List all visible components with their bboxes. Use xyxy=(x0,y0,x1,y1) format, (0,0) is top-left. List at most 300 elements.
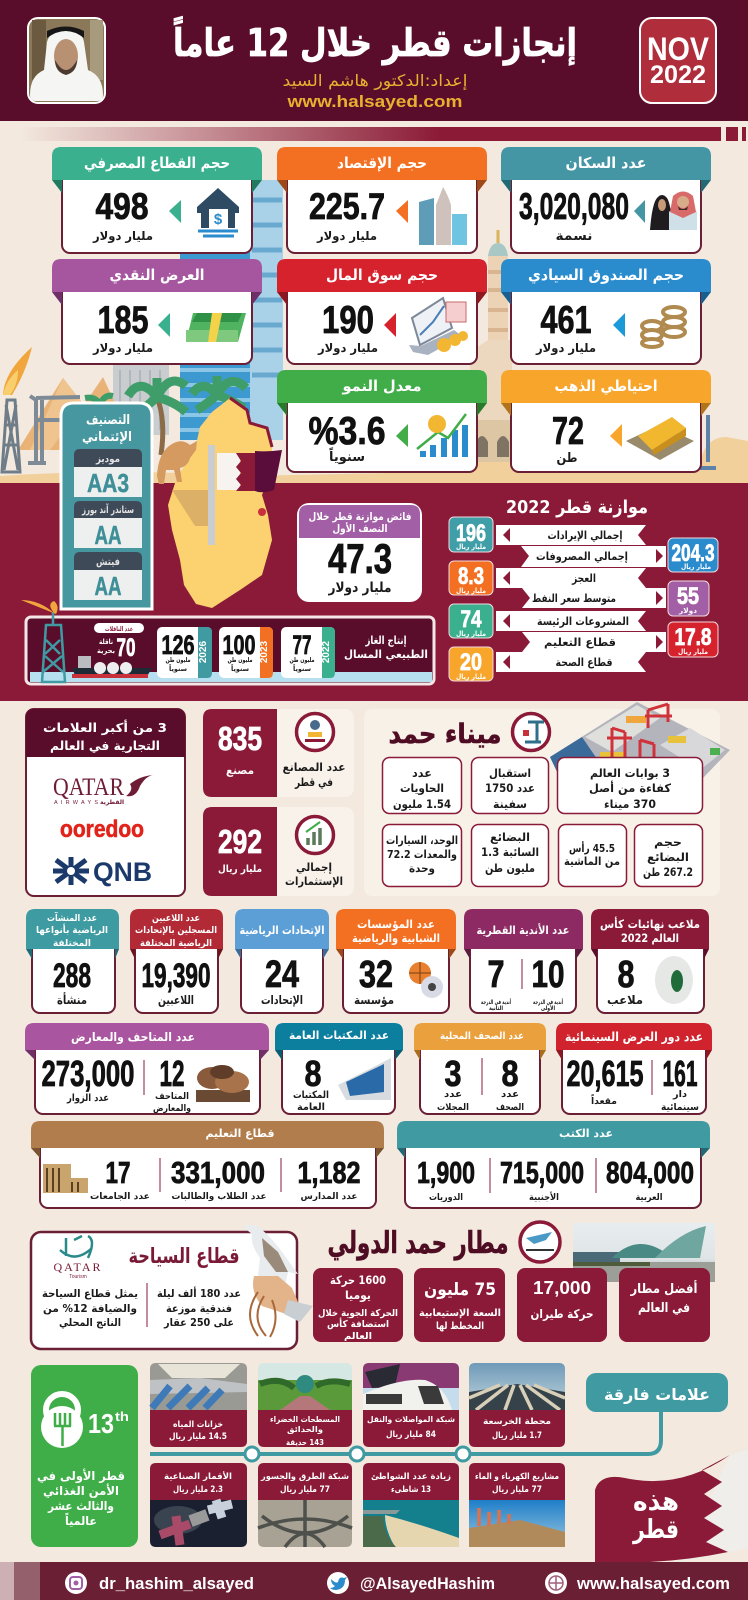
rating: Fitch: AA xyxy=(94,571,122,601)
flag pole xyxy=(208,445,215,545)
stat card: sovereign fund: حجم الصندوق السيادي xyxy=(528,266,684,285)
panel: tourism: يمثل قطاع السياحة xyxy=(42,1288,138,1300)
panel: food security: قطر الأولى في xyxy=(37,1468,125,1484)
rating: Fitch: فيتش xyxy=(96,557,120,568)
flag with text: this is Qatar: هذه xyxy=(633,1487,679,1517)
stat card: sports facilities: منشأة xyxy=(57,992,87,1007)
stat card: stadiums: 8 xyxy=(618,954,634,996)
stat card: capital market: مليار دولار xyxy=(317,341,378,356)
airport fact: World Cup traffic: الحركة الجوية خلال xyxy=(318,1308,398,1319)
stat card: local newspapers: الصحف xyxy=(496,1102,524,1113)
icon: globe xyxy=(545,1572,567,1594)
panel: investments: الإستثمارات xyxy=(285,875,343,888)
LNG 2023: 100 xyxy=(222,630,256,660)
icon: instagram xyxy=(65,1572,87,1594)
port fact: vehicles: وحدة xyxy=(409,862,435,875)
port fact: gateways: كفاءة من أصل xyxy=(589,780,671,795)
panel: top brands: 3 من أكبر العلامات xyxy=(43,719,167,735)
stat card: museums: المتاحف xyxy=(155,1092,189,1102)
port fact: vehicles xyxy=(382,824,462,886)
stat card: education sector: عدد الطلاب والطالبات xyxy=(172,1192,266,1202)
stat card: clubs: عدد الأندية القطرية xyxy=(476,923,570,937)
port fact: bulk cargo: مليون طن xyxy=(485,861,535,876)
stat card: growth rate: سنوياً xyxy=(329,447,365,465)
stat card: clubs: أندية في الدرجة xyxy=(533,998,563,1006)
stat card: stadiums: ملاعب نهائيات كأس xyxy=(600,916,700,931)
stat card: education sector: عدد المدارس xyxy=(300,1192,358,1202)
port fact: containers: الحاويات xyxy=(400,781,444,796)
panel: tourism: الناتج المحلي xyxy=(59,1317,121,1329)
milestone: roads: 77 مليار ريال xyxy=(280,1485,330,1495)
logo: Qatar Airways: QATAR xyxy=(53,774,124,801)
stat card: economy xyxy=(277,147,487,253)
panel: top brands: التجارية في العالم xyxy=(50,738,160,753)
heading: airport: مطار حمد الدولي xyxy=(328,1226,508,1261)
stat card: capital market: حجم سوق المال xyxy=(326,266,438,284)
airport fact: best airport xyxy=(619,1268,710,1342)
stat card: economy: 225.7 xyxy=(309,186,385,227)
tanker count: بحرية xyxy=(97,647,115,655)
stat card: youth institutions xyxy=(336,909,456,1013)
budget row: oil price: متوسط سعر النفط xyxy=(532,592,616,605)
heading: milestones: علامات فارقة xyxy=(604,1385,710,1404)
stat card: local newspapers: عدد xyxy=(501,1089,519,1100)
budget row: health: مليار ريال xyxy=(456,673,486,681)
budget row: major projects: 74 xyxy=(460,606,482,633)
stat card: museums: والمعارض xyxy=(153,1104,191,1114)
milestone: green spaces: 143 حديقة xyxy=(286,1438,324,1447)
budget row: major projects: مليار ريال xyxy=(456,630,486,638)
port fact: gateways xyxy=(558,758,702,814)
port fact: livestock xyxy=(558,824,626,886)
icon: gold bars xyxy=(626,417,694,460)
stat card: local newspapers: 3 xyxy=(444,1053,462,1094)
milestone connector line xyxy=(150,1412,661,1461)
port fact: containers xyxy=(382,758,462,814)
LNG 2023: سنوياً xyxy=(230,664,249,673)
panel: investments: إجمالي xyxy=(296,861,332,874)
card: budget surplus: 47.3 xyxy=(328,535,392,582)
panel: LNG production: الطبيعي المسال xyxy=(344,648,428,661)
stat card: sovereign fund: 461 xyxy=(540,299,592,342)
stat card: growth rate xyxy=(277,370,487,472)
stat card: books: 715,000 xyxy=(500,1155,584,1190)
airport fact: best airport: أفضل مطار xyxy=(630,1280,698,1297)
card: budget surplus xyxy=(297,503,422,602)
stat card: clubs: الأولى xyxy=(541,1004,555,1012)
icon: coins xyxy=(642,307,685,347)
port fact: gateways: 3 بوابات العالم xyxy=(590,766,670,781)
stat card: clubs: 7 xyxy=(488,954,504,996)
budget row: deficit: 8.3 xyxy=(458,563,484,590)
airport fact: World Cup traffic: 1600 حركة xyxy=(330,1273,386,1287)
logo: Qatar Tourism xyxy=(53,1236,103,1280)
stat card: money supply xyxy=(52,259,262,364)
stat card: population xyxy=(501,147,711,253)
LNG 2026: مليون طن xyxy=(166,656,190,664)
heading: ميناء حمد xyxy=(388,719,502,750)
milestone: roads: شبكة الطرق والجسور xyxy=(260,1472,349,1482)
port fact: cargo volume: 267.2 طن xyxy=(643,865,693,879)
stat card: clubs: الثانية xyxy=(489,1005,503,1012)
icon: bank: $ xyxy=(214,211,223,228)
footer band xyxy=(0,1562,748,1600)
stat card: growth rate: معدل النمو xyxy=(342,377,422,395)
stat card: stadiums: ملاعب xyxy=(607,993,643,1007)
icon: gas rig xyxy=(21,600,65,682)
panel: credit rating: الإئتماني xyxy=(82,430,132,445)
logo: Qatar Airways: AIRWAYS xyxy=(54,800,98,806)
milestone: Kharsaah plant xyxy=(469,1363,565,1447)
stat card: banking xyxy=(52,147,262,253)
flag xyxy=(217,450,282,492)
port fact: containers: 1.54 مليون xyxy=(393,797,451,812)
panel: Hamad port xyxy=(364,702,730,896)
date badge xyxy=(640,18,716,103)
panel: factories xyxy=(203,709,354,797)
airport fact: World Cup traffic xyxy=(313,1268,403,1342)
panel: factories: مصنع xyxy=(226,764,254,777)
budget row: oil price: دولار xyxy=(678,607,697,615)
stat card: sovereign fund xyxy=(501,259,711,364)
stat card: sports facilities: 288 xyxy=(53,957,91,995)
maroon budget band xyxy=(0,483,748,701)
stat card: gold reserve: احتياطي الذهب xyxy=(554,377,658,395)
budget row: revenue xyxy=(449,517,646,552)
stat card: youth institutions: الشبابية والرياضية xyxy=(352,931,440,946)
icon: LNG ship xyxy=(72,656,152,678)
stat card: public libraries: عدد المكتبات العامة xyxy=(289,1029,389,1042)
stat card: education sector: 1,182 xyxy=(298,1155,360,1190)
header strip xyxy=(20,127,746,141)
budget row: health: 20 xyxy=(460,649,482,676)
stat card: public libraries xyxy=(275,1023,403,1114)
icon: twitter xyxy=(327,1572,349,1594)
icon: port crane xyxy=(512,714,550,750)
airport fact: capacity: 75 مليون xyxy=(424,1280,496,1300)
website: www.halsayed.com xyxy=(286,92,462,111)
stat card: sports facilities xyxy=(26,909,119,1013)
icon: growth chart xyxy=(417,414,468,457)
icon: laptop chart xyxy=(409,298,468,355)
logo: Qatar Tourism: Tourism xyxy=(69,1274,87,1280)
milestone: beaches: 13 شاطىء xyxy=(391,1485,431,1495)
stat card: public libraries: المكتبات xyxy=(293,1090,329,1101)
tanker count: عدد الناقلات xyxy=(105,625,133,633)
budget row: expenditure: مليار ريال xyxy=(681,563,711,571)
airport fact: World Cup traffic: استضافة كأس xyxy=(327,1317,389,1330)
tanker count xyxy=(94,623,144,662)
milestone: Kharsaah plant: محطة الخرسعة xyxy=(483,1417,551,1427)
milestone: water reservoirs: خزانات المياه xyxy=(173,1420,223,1430)
stat card: registered players xyxy=(130,909,223,1013)
rating: Moody's: AA3 xyxy=(87,468,129,498)
flag with text: this is Qatar: قطر xyxy=(631,1515,679,1545)
port fact: livestock: من الماشية xyxy=(564,855,620,868)
logo: Qatar Tourism: QATAR xyxy=(53,1260,103,1274)
LNG 2022: 77 xyxy=(292,630,312,660)
airport fact: capacity: المخطط لها xyxy=(436,1321,484,1332)
stat card: capital market: 190 xyxy=(322,299,374,342)
stat card: local newspapers xyxy=(414,1023,546,1114)
stat card: cinemas: عدد دور العرض السينمائية xyxy=(565,1029,703,1044)
stat card: education sector: قطاع التعليم xyxy=(206,1127,274,1140)
stat card: registered players: اللاعبين xyxy=(158,993,194,1007)
stat card: museums: 273,000 xyxy=(42,1053,134,1094)
LNG 2022 xyxy=(281,627,335,678)
port fact: cargo volume xyxy=(634,824,702,886)
stat card: banking: 498 xyxy=(96,186,148,227)
icon: banknotes xyxy=(186,313,246,342)
title: إنجازات قطر خلال 12 عاماً xyxy=(173,16,577,66)
stat card: public libraries: العامة xyxy=(297,1102,325,1113)
panel: tourism: عدد 180 ألف ليلة xyxy=(157,1286,241,1300)
stat card: clubs xyxy=(464,909,583,1013)
stat card: capital market xyxy=(277,259,487,364)
stat card: local newspapers: 8 xyxy=(502,1053,518,1094)
panel: factories: 835 xyxy=(218,720,262,757)
panel: food security: الأمن الغذائي xyxy=(43,1483,119,1498)
icon: bank xyxy=(197,188,239,236)
stat card: cinemas: 20,615 xyxy=(566,1053,644,1094)
stat card: local newspapers: عدد xyxy=(444,1089,462,1100)
stat card: education sector xyxy=(31,1121,384,1208)
stat card: sovereign fund: مليار دولار xyxy=(535,341,596,356)
panel: food security: عالمياً xyxy=(65,1512,97,1528)
stat card: money supply: مليار دولار xyxy=(92,341,153,356)
icon: university building xyxy=(43,1164,88,1193)
airport fact: best airport: في العالم xyxy=(638,1301,690,1316)
budget row: expenditure: إجمالي المصروفات xyxy=(536,550,628,563)
stat card: books: 804,000 xyxy=(606,1155,694,1190)
card: budget surplus: مليار دولار xyxy=(328,580,392,596)
milestone: Kharsaah plant: 1.7 مليار ريال xyxy=(492,1431,542,1441)
stat card: local newspapers: المجلات xyxy=(437,1102,469,1113)
stat card: education sector: 331,000 xyxy=(171,1155,265,1190)
airport fact: flights: 17,000 xyxy=(533,1278,591,1298)
panel: top brands xyxy=(26,709,185,896)
port fact: bulk cargo: البضائع xyxy=(490,830,530,844)
stat card: books: الدوريات xyxy=(429,1193,463,1203)
budget row: oil price xyxy=(522,581,709,616)
icon: camel xyxy=(157,441,197,484)
author: إعداد:الدكتور هاشم السيد xyxy=(282,71,468,91)
LNG 2026: 2026 xyxy=(198,640,209,663)
icon: food lock xyxy=(41,1394,83,1448)
icon: balls xyxy=(409,962,443,998)
panel: factories: عدد المصانع xyxy=(282,760,346,774)
icon: factory gear xyxy=(296,714,334,750)
stat card: stadiums xyxy=(591,909,709,1013)
stat card: sports facilities: المختلفة xyxy=(53,938,91,949)
milestone: transport network xyxy=(363,1363,459,1447)
budget row: deficit: العجز xyxy=(571,572,596,585)
panel: LNG production: إنتاج الغاز xyxy=(365,634,406,648)
budget row: major projects xyxy=(449,604,646,638)
budget row: major projects: المشروعات الرئيسة xyxy=(537,615,629,628)
stat card: sports facilities: الرياضية بأنواعها xyxy=(36,923,108,936)
stat card: books xyxy=(397,1121,710,1208)
tanker count: ناقلة xyxy=(99,638,113,646)
stat card: money supply: 185 xyxy=(98,299,148,342)
icon: towers xyxy=(419,187,467,245)
stat card: books: 1,900 xyxy=(417,1155,475,1190)
milestone: transport network: 84 مليار ريال xyxy=(386,1430,436,1440)
tanker count: 70 xyxy=(116,634,136,662)
stat card: registered players: عدد اللاعبين xyxy=(152,913,200,924)
panel: food security: 13 xyxy=(88,1408,114,1439)
milestone: water reservoirs xyxy=(150,1363,247,1447)
panel: investments: مليار ريال xyxy=(218,864,262,875)
panel: tourism xyxy=(31,1232,297,1349)
stat card: cinemas: سينمائية xyxy=(661,1102,699,1113)
port fact: ships: سفينة xyxy=(493,797,527,811)
port fact: ships: عدد 1750 xyxy=(485,781,535,795)
stat card: books: العربية xyxy=(636,1193,662,1203)
rating: Standard and Poor's: AA xyxy=(94,520,122,550)
milestone: electricity and water xyxy=(469,1463,565,1547)
budget row: education: قطاع التعليم xyxy=(544,636,616,649)
logo: Ooredoo: ooredoo xyxy=(60,816,144,843)
header band xyxy=(0,0,748,121)
stat card: museums: عدد المتاحف والمعارض xyxy=(71,1030,195,1045)
milestone: beaches xyxy=(363,1463,459,1547)
stat card: registered players: 19,390 xyxy=(142,957,210,995)
stat card: education sector: 17 xyxy=(106,1155,130,1190)
panel: credit rating xyxy=(61,403,152,609)
stat card: books: الأجنبية xyxy=(529,1191,559,1203)
airport fact: flights xyxy=(517,1268,607,1342)
heading: موازنة قطر 2022 xyxy=(506,497,648,518)
icon: stadium xyxy=(655,956,693,1004)
LNG 2026: 126 xyxy=(162,630,194,660)
budget row: deficit: مليار ريال xyxy=(456,587,486,595)
background illustration: skyline and desert xyxy=(0,180,748,483)
map of Qatar with flag xyxy=(157,398,282,608)
stat card: clubs: 10 xyxy=(532,954,564,996)
panel: LNG production xyxy=(21,600,434,684)
panel: tourism: قطاع السياحة xyxy=(128,1244,240,1268)
card: budget surplus: النصف الأول xyxy=(332,522,388,535)
milestone: beaches: زيادة عدد الشواطئ xyxy=(371,1472,451,1482)
flag with text: this is Qatar xyxy=(595,1450,748,1562)
port fact: bulk cargo: السائبة 1.3 xyxy=(481,845,539,859)
stat card: gold reserve xyxy=(501,370,711,472)
stat card: stadiums: العالم 2022 xyxy=(621,931,679,945)
card: budget surplus: فائض موازنة قطر خلال xyxy=(308,511,412,523)
date badge: 2022 xyxy=(650,61,706,89)
stat card: registered players: الرياضية المختلفة xyxy=(140,938,212,949)
panel: food security: th xyxy=(115,1409,129,1424)
port fact: cargo volume: البضائع xyxy=(647,850,689,864)
airport fact: World Cup traffic: العالم xyxy=(344,1331,372,1342)
stat card: money supply: العرض النقدي xyxy=(110,266,204,285)
budget row: health: قطاع الصحة xyxy=(556,656,612,669)
stat card: banking: حجم القطاع المصرفي xyxy=(84,154,230,172)
stat card: museums: 12 xyxy=(160,1053,184,1094)
logo: Qatar Airways: القطرية xyxy=(100,799,124,806)
date badge: NOV xyxy=(647,31,710,67)
budget row: revenue: مليار ريال xyxy=(456,543,486,551)
stat card: museums xyxy=(25,1023,269,1114)
milestone: satellites: 2.3 مليار ريال xyxy=(173,1485,223,1495)
stat card: registered players: المسجلين بالإتحادات xyxy=(135,925,217,936)
LNG 2022: 2022 xyxy=(321,640,332,663)
website: www.halsayed.com xyxy=(576,1574,730,1593)
port fact: cargo volume: حجم xyxy=(654,835,682,849)
airport fact: World Cup traffic: يوميا xyxy=(345,1288,371,1303)
budget row: revenue: 196 xyxy=(456,520,486,547)
panel: tourism: فندقية موزعة xyxy=(166,1303,232,1315)
milestone: electricity and water: مشاريع الكهرباء و الماء xyxy=(475,1472,559,1482)
panel: investments xyxy=(203,807,354,896)
budget row: expenditure xyxy=(521,538,718,572)
stat card: cinemas: دار xyxy=(672,1089,687,1100)
photo: national library xyxy=(338,1058,391,1100)
logo: Qatar Airways xyxy=(53,774,153,806)
stat card: cinemas: مقعداً xyxy=(591,1094,617,1107)
illustration: falcon on hand xyxy=(243,1225,313,1337)
milestone: water reservoirs: 14.5 مليار ريال xyxy=(169,1432,227,1442)
budget row: education: 17.8 xyxy=(674,624,712,651)
stat card: gold reserve: طن xyxy=(556,451,578,466)
budget row: deficit xyxy=(449,561,646,595)
port fact: ships xyxy=(472,758,548,814)
Twitter handle: @AlsayedHashim xyxy=(360,1574,495,1593)
rating: Standard and Poor's: ستاندر آند بورز xyxy=(81,503,134,516)
logo: QNB: QNB xyxy=(93,857,152,887)
stat card: economy: حجم الإقتصاد xyxy=(337,154,427,172)
stat card: gold reserve: 72 xyxy=(552,410,584,453)
stat card: education sector: عدد الجامعات xyxy=(90,1192,150,1202)
stat card: banking: مليار دولار xyxy=(92,229,153,244)
stat card: sports facilities: عدد المنشآت xyxy=(47,911,97,924)
Instagram handle: dr_hashim_alsayed xyxy=(99,1574,254,1593)
heading: milestones xyxy=(586,1373,728,1412)
LNG 2026: سنوياً xyxy=(168,664,187,673)
panel: tourism: والضيافة 12% من xyxy=(43,1303,137,1315)
stat card: clubs: أندية في الدرجة xyxy=(481,998,511,1006)
stat card: economy: مليار دولار xyxy=(316,229,377,244)
stat card: youth institutions: عدد المؤسسات xyxy=(357,917,435,932)
rating: Fitch xyxy=(74,552,142,601)
airport fact: capacity xyxy=(414,1268,505,1342)
port fact: containers: عدد xyxy=(412,766,432,780)
budget row: education: مليار ريال xyxy=(678,648,708,656)
budget row: expenditure: 204.3 xyxy=(672,540,714,567)
stat card: museums: عدد الزوار xyxy=(66,1093,109,1104)
port fact: ships: استقبال xyxy=(489,766,531,780)
airport fact: flights: حركة طيران xyxy=(530,1307,594,1321)
portrait xyxy=(28,18,105,103)
panel: factories: في قطر xyxy=(294,775,333,789)
logo: QNB xyxy=(53,857,152,887)
panel: credit rating: التصنيف xyxy=(86,413,130,428)
milestone: satellites: الأقمار الصناعية xyxy=(164,1471,232,1482)
LNG 2023: 2023 xyxy=(259,640,270,663)
panel: tourism: على 250 عقار xyxy=(163,1317,234,1329)
photo: Hamad airport xyxy=(573,1223,715,1282)
stat card: youth institutions: 32 xyxy=(359,954,393,996)
rating: Moody's xyxy=(74,449,142,498)
rating: Standard and Poor's xyxy=(74,501,142,550)
milestone: roads xyxy=(258,1463,352,1547)
stat card: books: عدد الكتب xyxy=(559,1127,613,1140)
panel: investments: 292 xyxy=(218,823,262,860)
stat card: cinemas: 161 xyxy=(662,1053,698,1094)
milestone: green spaces: والحدائق xyxy=(287,1425,323,1434)
budget row: revenue: إجمالي الإيرادات xyxy=(548,529,622,542)
